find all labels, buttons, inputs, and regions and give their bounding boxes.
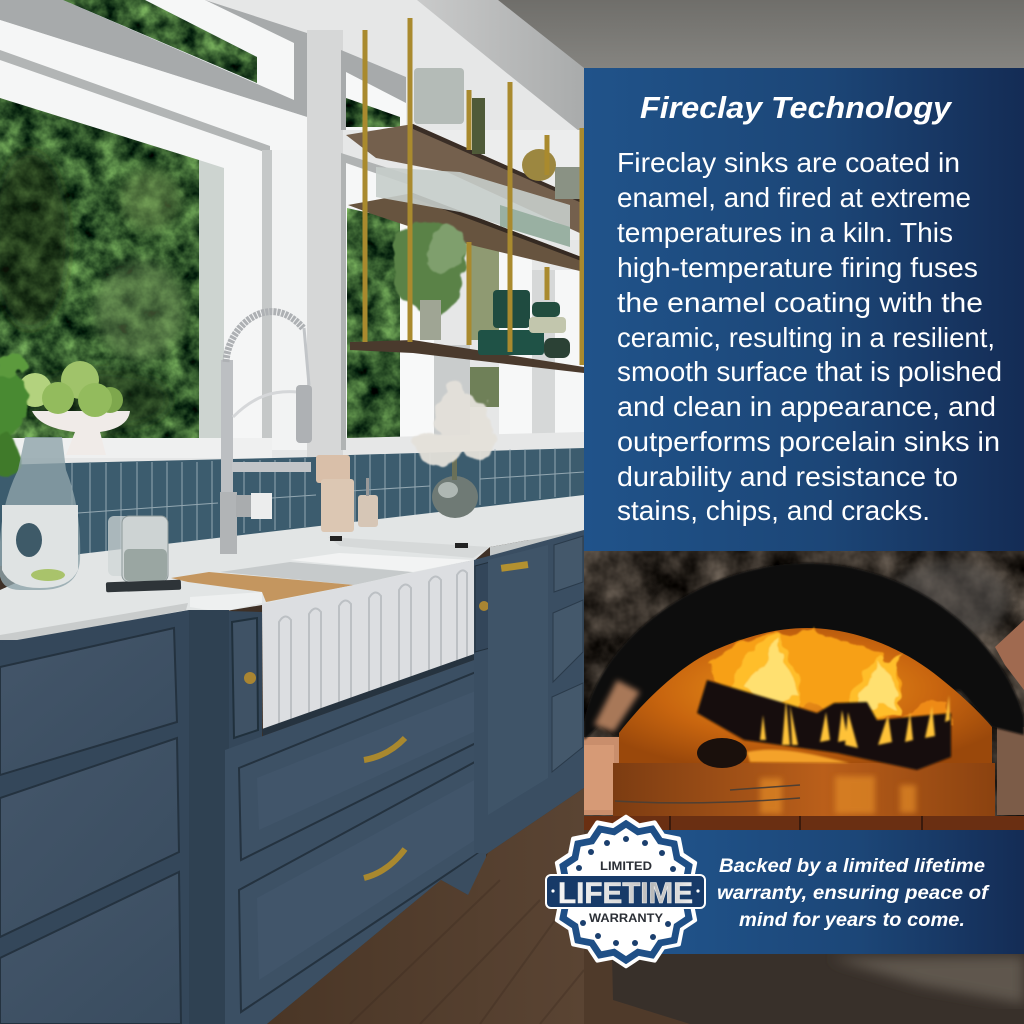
warranty text: warranty, ensuring peace of [717,883,990,904]
apron front sink [262,560,474,736]
oven floor [584,763,1024,831]
flower vase [414,380,496,518]
right window and reflections [341,50,584,452]
sink top and cutting board [171,536,490,602]
brick jambs [584,727,1024,815]
limited label: LIMITED [600,861,652,873]
ceiling above panel [498,0,1024,68]
shelf plant and dishes [390,220,570,358]
wall and ceiling [0,0,584,540]
drinking glasses [106,516,181,592]
wood floor [267,788,584,1024]
faucet [220,312,312,554]
body text: Fireclay sinks are coated in [617,147,960,178]
body text: the enamel coating with the [617,287,983,318]
body text: outperforms porcelain sinks in [617,426,1000,457]
flame licks [760,695,950,748]
burning log [697,680,951,770]
body text: durability and resistance to [617,461,958,492]
panel: fireclay technology [584,68,1024,551]
tiled backsplash [0,448,584,566]
shelf glassware [376,68,584,247]
badge: limited lifetime warranty [546,816,705,966]
body text: ceramic, resulting in a resilient, [617,322,995,353]
left main window [0,20,307,458]
warranty text: Backed by a limited lifetime [719,856,985,877]
countertop [0,495,584,645]
fruit stand with apples [21,361,130,438]
kiln interior [619,628,992,764]
body text: temperatures in a kiln. This [617,217,953,248]
body text: smooth surface that is polished [617,356,1002,387]
ribbon: LIFETIME [558,877,693,910]
left transom window [0,0,307,117]
body text: high-temperature firing fuses [617,252,978,283]
photo: kitchen scene [0,0,584,1024]
open shelves [346,18,584,373]
stone surround [584,551,1024,831]
body text [617,147,1002,526]
photo: wood-fired kiln [584,551,1024,831]
glass pitcher [0,437,80,590]
warranty label: WARRANTY [589,911,663,925]
base cabinets [0,530,584,1024]
heading: Fireclay Technology [640,90,953,125]
body text: enamel, and fired at extreme [617,182,971,213]
warranty banner [660,830,1024,954]
warranty text: mind for years to come. [739,910,965,931]
wood beam and floor below [584,830,1024,1024]
body text: stains, chips, and cracks. [617,495,930,526]
soot-stained brick [594,680,640,732]
warranty text [717,856,990,931]
badge dots [576,836,676,946]
body text: and clean in appearance, and [617,391,996,422]
black arch [584,563,1024,740]
flames [708,632,950,725]
canisters [316,455,378,532]
plant [0,358,28,477]
